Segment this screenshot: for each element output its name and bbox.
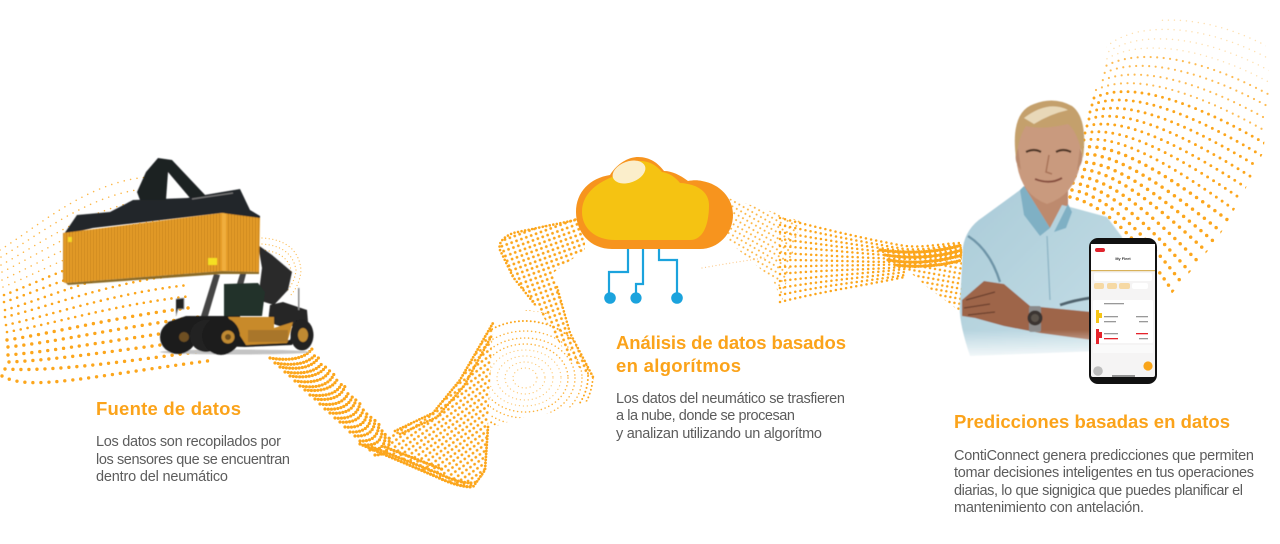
man hair [1015, 100, 1084, 158]
cloud circuit lines [609, 249, 677, 298]
truck mirror [176, 298, 184, 316]
truck exhaust [298, 288, 300, 310]
heading: Análisis de datos basados [616, 332, 846, 353]
man shirt folds [968, 236, 1000, 282]
illustration: phone with app [1089, 238, 1157, 384]
dotted wave: cloud to person [702, 198, 962, 313]
dotted wave: upper ribbon to cloud [500, 216, 594, 380]
text block: predicciones [954, 411, 1254, 516]
body [96, 434, 290, 485]
heading: en algorítmos [616, 355, 741, 376]
truck masts [201, 274, 246, 316]
body: mantenimiento con antelación. [954, 500, 1144, 516]
app alert tyre icons [1096, 310, 1102, 344]
body: a la nube, donde se procesan [616, 408, 795, 424]
body: ContiConnect genera predicciones que permiten [954, 448, 1254, 464]
body [616, 391, 845, 442]
body: tomar decisiones inteligentes en tus operaciones [954, 465, 1254, 481]
app card text bars [1104, 303, 1148, 339]
truck rear housing [268, 302, 308, 328]
man forearms [962, 281, 1092, 340]
body: y analizan utilizando un algorítmo [616, 426, 822, 442]
truck chassis [165, 316, 303, 347]
shipping container [63, 213, 260, 285]
truck upper arm [137, 158, 206, 200]
man head [1017, 115, 1082, 204]
app title: My Fleet [1115, 257, 1131, 261]
body: dentro del neumático [96, 469, 228, 485]
app search bar [1094, 273, 1152, 281]
dotted wave: dense arcs ribbon [270, 349, 473, 487]
dotted wave: left blob behind truck [0, 177, 301, 383]
app logo pill [1095, 248, 1105, 252]
app filter chips [1094, 283, 1148, 289]
cloud outer shape [576, 157, 733, 249]
body: los sensores que se encuentran [96, 452, 290, 468]
icon: cloud with circuit [576, 156, 733, 304]
man shirt [960, 190, 1126, 356]
man smile [1035, 178, 1062, 182]
truck wheels [160, 317, 314, 355]
man eyes and brows [1026, 150, 1071, 152]
text block: fuente de datos [96, 398, 290, 485]
truck yellow body [228, 317, 293, 345]
circuit nodes [604, 292, 683, 304]
cloud inner shape [582, 161, 709, 240]
truck cab [224, 283, 265, 316]
body [954, 448, 1254, 516]
app vehicle card [1093, 300, 1153, 343]
body: Los datos son recopilados por [96, 434, 281, 450]
illustration: man with crossed arms [950, 100, 1126, 362]
man watch [1028, 306, 1042, 332]
truck body shade [248, 330, 288, 342]
cloud highlight [609, 156, 649, 188]
dotted wave: lower ribbon fold [385, 323, 493, 488]
man shirt placket [1047, 236, 1050, 300]
truck boom arm [258, 245, 292, 305]
illustration: container handler truck [63, 158, 314, 355]
truck shadow [160, 350, 310, 354]
heading: Predicciones basadas en datos [954, 411, 1230, 432]
phone body [1089, 238, 1157, 384]
heading [616, 332, 846, 376]
app gold divider [1091, 270, 1155, 271]
app list row [1093, 345, 1153, 353]
app header [1091, 244, 1155, 270]
body: diarias, lo que signigica que puedes planificar el [954, 483, 1243, 499]
app round button [1093, 366, 1103, 376]
app action button [1143, 361, 1153, 371]
man nose shade [1046, 155, 1052, 174]
man ears [1016, 148, 1082, 170]
man neck [1024, 182, 1068, 232]
phone home bar [1112, 376, 1135, 377]
truck spreader beam [64, 189, 260, 234]
heading: Fuente de datos [96, 398, 241, 419]
dotted wave: faint loop [490, 310, 594, 426]
dotted wave: top right blob [1070, 20, 1280, 310]
body: Los datos del neumático se trasfieren [616, 391, 845, 407]
man shirt collar [1020, 186, 1072, 236]
phone screen [1091, 244, 1155, 377]
man bottom fade [950, 330, 1095, 362]
text block: analisis de datos [616, 332, 846, 442]
